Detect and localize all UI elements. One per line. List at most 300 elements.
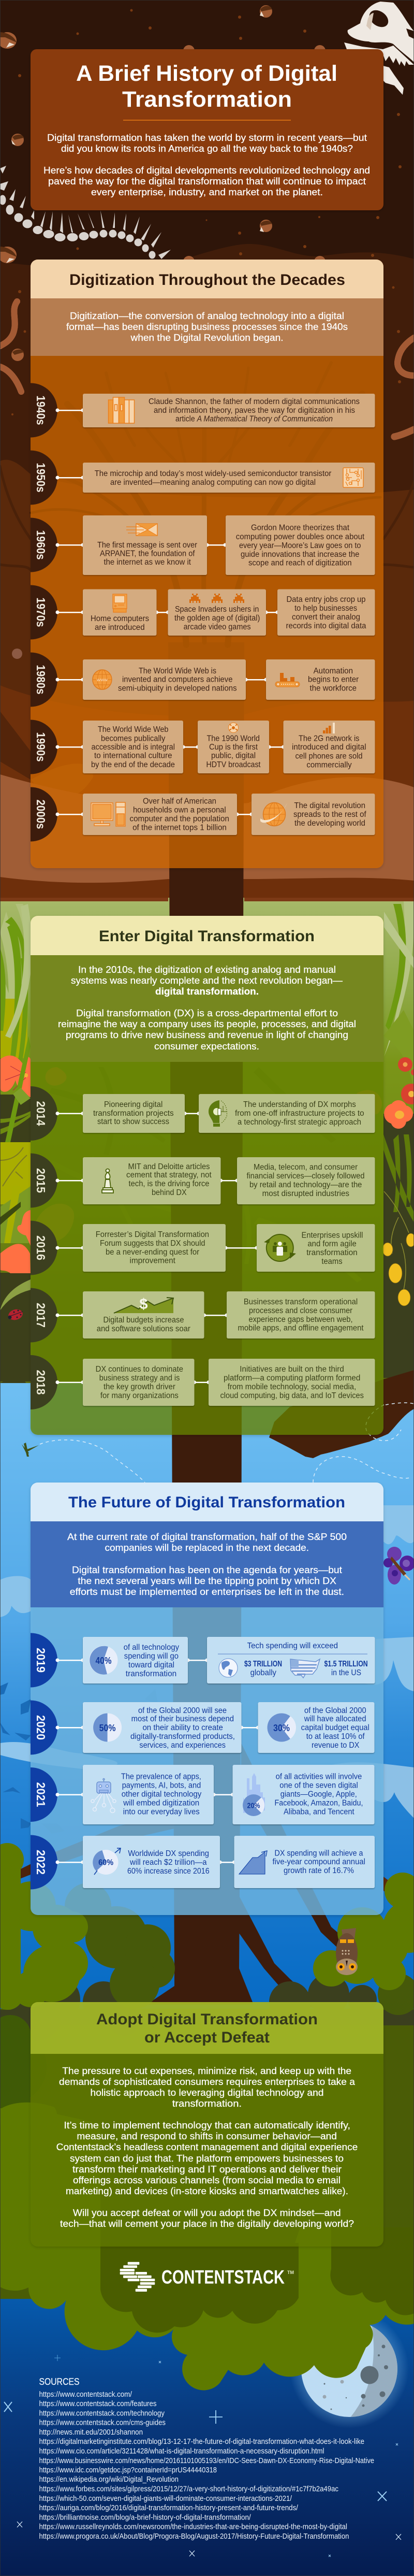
background: grass section — [0, 898, 414, 1400]
sources heading: SOURCES — [39, 2377, 80, 2387]
connector — [56, 1112, 201, 1115]
year pill — [31, 383, 57, 437]
logo wordmark: CONTENTSTACK — [161, 2266, 285, 2287]
card: $3 TRILLION — [244, 1660, 282, 1668]
card: of the internet tops 1 billion — [132, 824, 227, 832]
card — [83, 1765, 214, 1824]
section intro: Digital transformation has been on the agenda for years—but — [72, 1565, 342, 1575]
section header band — [31, 1483, 383, 1521]
icon: skyscraper pie 20%: 20% — [247, 1802, 260, 1810]
dinosaur skull fossil — [344, 2, 414, 95]
connector — [56, 812, 254, 816]
card: convert their analog — [292, 613, 360, 622]
background: soil layers — [0, 0, 414, 901]
card — [237, 1157, 375, 1204]
closing text: Will you accept defeat or will you adopt the DX mindset—and — [73, 2208, 341, 2218]
card — [257, 1224, 375, 1272]
connector — [56, 610, 279, 614]
card: the key growth driver — [103, 1383, 175, 1391]
connector — [56, 1314, 229, 1317]
year pill: 1990s — [34, 732, 48, 761]
icon: chess bishop — [102, 1169, 113, 1193]
section intro — [31, 1521, 383, 1607]
year pill: 1950s — [34, 463, 48, 492]
pie chart: 40%: 40% — [95, 1656, 112, 1666]
card: invented and computers achieve — [122, 675, 232, 684]
card: DX continues to dominate — [96, 1365, 183, 1374]
card: computing power doubles once about — [236, 533, 365, 541]
logo mark — [120, 2262, 155, 2292]
closing text: transform their marketing and IT operations and deliver their — [72, 2164, 342, 2175]
card: MIT and Deloitte articles — [128, 1162, 210, 1171]
section intro: reimagine the way a company uses its people, processes, and digital — [58, 1019, 356, 1029]
year pill: 2014 — [34, 1101, 48, 1126]
section heading: or Accept Defeat — [144, 2029, 270, 2046]
clouds — [0, 1505, 414, 1818]
section intro: In the 2010s, the digitization of existing analog and manual — [78, 965, 336, 975]
card — [83, 1291, 204, 1339]
card: transformation — [126, 1670, 176, 1678]
card: the golden age of (digital) — [174, 614, 260, 623]
card — [258, 1702, 375, 1753]
card: and form agile — [307, 1240, 357, 1248]
card: teams — [321, 1257, 343, 1266]
card — [83, 515, 207, 575]
card: will embed digitization — [123, 1799, 199, 1808]
source links: http://news.mit.edu/2001/shannon — [39, 2428, 143, 2437]
card: Media, telecom, and consumer — [254, 1163, 358, 1172]
card: will reach $2 trillion—a — [129, 1858, 207, 1867]
year pill — [31, 787, 57, 841]
card: accessible and is integral — [91, 743, 175, 752]
soil roots — [0, 363, 414, 645]
main title: A Brief History of Digital — [76, 61, 337, 86]
source links: https://www.progora.co.uk/About/Blog/Progora-Blog/August-2017/History-Future-Digital-Transformation — [39, 2532, 349, 2541]
year pill: 2018 — [34, 1370, 48, 1395]
closing text: offerings across various channels (from social media to email — [73, 2175, 341, 2185]
card — [198, 721, 269, 773]
card: of the Global 2000 — [304, 1706, 366, 1715]
panel: digitization throughout the decades — [31, 260, 383, 868]
card: every year—Moore’s Law goes on to — [239, 541, 361, 550]
lower left orange flowers — [0, 1210, 31, 1273]
timeline: 2017 — [31, 1288, 375, 1343]
card: digitally-transformed products, — [130, 1732, 235, 1741]
icon: email — [126, 524, 157, 536]
card: mobile apps, and offline engagement — [238, 1324, 364, 1333]
timeline: 2022 — [31, 1835, 375, 1890]
card: into our everyday lives — [123, 1808, 200, 1817]
card: Forrester’s Digital Transformation — [96, 1230, 209, 1239]
card: tech, is the driving force — [128, 1179, 209, 1188]
card — [83, 1224, 226, 1272]
closing text: The pressure to cut expenses, minimize risk, and keep up with the — [62, 2066, 351, 2076]
card: by retail and technology—are the — [249, 1181, 362, 1189]
card: most of their business depend — [131, 1715, 234, 1723]
card: Cup is the first — [209, 743, 258, 752]
card: most disrupted industries — [262, 1189, 349, 1198]
strawberries — [382, 1233, 414, 1306]
year pill: 2019 — [34, 1648, 48, 1673]
closing text: holistic approach to leveraging digital technology and — [90, 2088, 324, 2098]
icon: factory conveyor — [275, 673, 300, 687]
icon: growth chart with dollar — [114, 1296, 173, 1313]
source links: https://brilliantnoise.com/blog/a-brief-history-of-digital-transformation/ — [39, 2513, 252, 2522]
section header band — [31, 916, 383, 955]
intro text: paved the way for the digital transformation that will continue to impact — [48, 176, 366, 186]
card: are introduced — [95, 623, 145, 632]
year pill — [31, 1220, 57, 1275]
card: the internet as we know it — [103, 558, 191, 567]
card: Gordon Moore theorizes that — [251, 524, 350, 533]
card: behind DX — [152, 1188, 187, 1197]
dragonfly — [22, 1443, 39, 1457]
card: for many organizations — [100, 1391, 179, 1400]
timeline: 2020 — [31, 1700, 375, 1755]
closing text: measure, and respond to shifts in consumer behavior—and — [77, 2131, 337, 2141]
intro text: every enterprise, industry, and market on the planet. — [91, 187, 323, 197]
card: transformation — [306, 1248, 358, 1257]
card: The understanding of DX morphs — [243, 1100, 356, 1109]
card: Initiatives are built on the third — [240, 1365, 344, 1374]
card: transformation projects — [93, 1109, 174, 1118]
closing text: marketing) and devices (in-store kiosks and smartwatches alike). — [66, 2186, 348, 2196]
connector — [56, 543, 227, 547]
section intro: At the current rate of digital transformation, half of the S&P 500 — [67, 1532, 347, 1542]
year pill — [31, 518, 57, 572]
connector — [56, 1793, 234, 1796]
card: toward digital — [128, 1661, 174, 1670]
card: of the Global 2000 will see — [138, 1706, 227, 1715]
connector — [56, 1380, 210, 1384]
card — [234, 1836, 375, 1888]
card: public, digital — [211, 752, 256, 760]
card: ARPANET, the foundation of — [100, 550, 195, 558]
card: Over half of American — [143, 797, 216, 806]
card: HDTV broadcast — [206, 760, 261, 769]
card — [83, 463, 375, 493]
earthworms — [0, 301, 414, 437]
card: the developing world — [294, 819, 365, 828]
icon: desktop pc — [91, 802, 125, 826]
contentstack logo — [120, 2262, 294, 2292]
year pill: 2022 — [34, 1850, 48, 1875]
card: The World Wide Web — [98, 725, 168, 734]
card — [199, 1094, 375, 1133]
timeline: 2014 — [31, 1086, 375, 1141]
card: to help businesses — [294, 604, 357, 613]
timeline: 2000s — [31, 787, 375, 841]
section heading: The Future of Digital Transformation — [68, 1494, 345, 1511]
card: $1.5 TRILLION — [324, 1660, 368, 1668]
card — [284, 721, 375, 773]
card — [83, 1157, 220, 1204]
card: Businesses transform operational — [244, 1298, 358, 1306]
section intro: the next several years will be the tipping point by which DX — [78, 1576, 336, 1586]
year pill — [31, 1835, 57, 1890]
source links: https://www.contentstack.com/cms-guides — [39, 2419, 166, 2427]
card — [227, 1291, 375, 1339]
section heading: Adopt Digital Transformation — [96, 2011, 318, 2028]
card: Space Invaders ushers in — [175, 605, 259, 614]
card: of all activities will involve — [276, 1773, 362, 1781]
source links: https://www.contentstack.com/technology — [39, 2409, 165, 2417]
connector — [56, 678, 268, 682]
year pill — [31, 1633, 57, 1688]
card — [266, 659, 375, 700]
card: The microchip and today’s most widely-used semiconductor transistor — [95, 469, 331, 478]
card: Claude Shannon, the father of modern digital communications — [149, 397, 360, 406]
icon: agile team — [264, 1234, 296, 1261]
connector — [56, 408, 85, 412]
connector — [56, 1861, 236, 1864]
card: giants—Google, Apple, — [280, 1790, 357, 1799]
closing text: system can do just that. The platform empowers businesses to — [70, 2153, 344, 2164]
tree trunk — [146, 642, 254, 2005]
section intro: consumer expectations. — [154, 1041, 259, 1052]
icon: books — [109, 397, 135, 423]
section intro: systems was nearly complete and the next revolution began— — [71, 975, 343, 986]
soil pebbles and specks — [0, 5, 402, 659]
card — [252, 794, 375, 835]
card: five-year compound annual — [272, 1858, 365, 1866]
card: processes and close consumer — [249, 1306, 352, 1315]
card — [83, 1836, 220, 1888]
card: The 2G network is — [299, 735, 360, 743]
sources list — [39, 2377, 374, 2541]
card: DX spending will achieve a — [275, 1849, 363, 1858]
card: scope and reach of digitization — [248, 559, 352, 568]
icon: circuit board — [343, 468, 363, 487]
closing text: tech—that will cement your place in the digitally developing world? — [60, 2219, 354, 2229]
section heading: Enter Digital Transformation — [99, 928, 315, 945]
card: households own a personal — [133, 806, 226, 815]
connector — [56, 1659, 209, 1662]
source links: https://which-50.com/seven-digital-giants-will-dominate-consumer-interactions-2021/ — [39, 2495, 292, 2503]
card: commercially — [306, 760, 352, 770]
year pill: 2000s — [34, 800, 48, 829]
ladybug — [7, 1308, 24, 1321]
card — [168, 589, 266, 636]
night moon — [293, 2322, 406, 2426]
card: 60% increase since 2016 — [127, 1867, 210, 1876]
card — [83, 1359, 195, 1406]
icon: tech lightbulb — [209, 1100, 227, 1127]
card — [83, 794, 237, 835]
icon: signal bars — [323, 723, 335, 733]
header panel — [31, 49, 383, 210]
card: by the end of the decade — [91, 760, 175, 769]
year pill — [31, 1086, 57, 1141]
closing text: It’s time to implement technology that can automatically identify, — [64, 2120, 350, 2131]
intro text: Digital transformation has taken the world by storm in recent years—but — [47, 133, 367, 143]
source links: https://www.forbes.com/sites/gilpress/2015/12/27/a-very-short-history-of-digitization/#1c7f7b2a49ac — [39, 2485, 338, 2494]
year pill — [31, 1355, 57, 1409]
timeline: 1980s — [31, 653, 375, 707]
year pill: 1970s — [34, 598, 48, 627]
icon: www globe — [93, 670, 112, 689]
card: other digital technology — [122, 1790, 202, 1799]
card: of all technology — [124, 1643, 179, 1652]
closing text: Contentstack’s headless content management and digital experience — [56, 2142, 358, 2152]
card: spending will go — [124, 1652, 179, 1661]
year pill: 2020 — [34, 1715, 48, 1740]
card — [233, 1765, 375, 1824]
card — [226, 515, 375, 575]
intro text: Here’s how decades of digital developments revolutionized technology and — [43, 165, 370, 176]
card: from mobile technology, social media, — [228, 1383, 356, 1391]
section heading — [96, 2011, 318, 2046]
source links: https://www.russellreynolds.com/newsroom/the-industries-that-are-being-disrupted-the-most-by-digital — [39, 2523, 347, 2531]
card: will have allocated — [304, 1715, 366, 1723]
card — [83, 1702, 241, 1753]
card: The World Wide Web is — [139, 667, 216, 675]
main title line 2: Transformation — [122, 87, 292, 112]
timeline: 2015 — [31, 1153, 375, 1208]
tree root mass — [269, 1370, 414, 1458]
card: The prevalence of apps, — [121, 1773, 201, 1781]
icon: growth chart with dollar: $ — [139, 1296, 148, 1313]
timeline: 2016 — [31, 1220, 375, 1275]
year pill: 2021 — [34, 1782, 48, 1807]
card — [83, 589, 156, 636]
card: to international culture — [94, 752, 172, 760]
card: from one-off infrastructure projects to — [235, 1109, 364, 1118]
card: Alibaba, and Tencent — [284, 1808, 354, 1817]
icon: home computer — [113, 594, 127, 612]
panel: the future of digital transformation — [31, 1483, 383, 1915]
card: cloud computing, big data, and IoT devices — [220, 1391, 364, 1400]
timeline: 2021 — [31, 1765, 375, 1824]
tree foliage — [0, 1843, 414, 2390]
card: to at least 10% of — [306, 1732, 365, 1741]
icon: growth area chart — [239, 1851, 267, 1874]
year pill — [31, 1700, 57, 1755]
pie chart: 40% — [89, 1646, 118, 1675]
intro text: did you know its roots in America go all the way back to the 1940s? — [61, 143, 353, 154]
card: payments, AI, bots, and — [122, 1781, 201, 1790]
section intro — [31, 298, 383, 356]
section intro: efforts must be implemented or enterprises be left in the dust. — [70, 1587, 344, 1597]
card: start to show success — [97, 1117, 169, 1126]
closing text: demands of sophisticated consumers requires enterprises to take a — [59, 2077, 356, 2087]
panel background — [31, 49, 383, 210]
card — [83, 659, 246, 700]
section intro — [31, 955, 383, 1062]
card: on their ability to create — [142, 1723, 223, 1732]
card: and software solutions soar — [97, 1325, 190, 1333]
source links: https://digitalmarketinginstitute.com/blog/13-12-17-the-future-of-digital-transformation-what-does-it-look-like — [39, 2438, 364, 2446]
card — [83, 1094, 185, 1133]
card — [207, 1637, 375, 1683]
stars — [4, 2355, 401, 2557]
card: Digital budgets increase — [103, 1316, 184, 1325]
icon: space invaders — [189, 594, 244, 603]
card: Automation — [314, 667, 353, 675]
section intro: digital transformation. — [155, 986, 259, 997]
card: Tech spending will exceed — [247, 1642, 338, 1650]
year pill — [31, 1767, 57, 1822]
card: Enterprises upskill — [302, 1231, 363, 1240]
pie chart: 60%: 60% — [98, 1859, 113, 1867]
card: experience gaps between web, — [248, 1315, 353, 1324]
source links — [39, 2391, 374, 2541]
card — [83, 721, 183, 773]
closing text — [56, 2066, 358, 2229]
section intro: programs to drive new business and revenue in light of changing — [66, 1030, 348, 1040]
icon: globe — [219, 1659, 238, 1677]
card: Pioneering digital — [104, 1100, 162, 1109]
card: Data entry jobs crop up — [287, 595, 365, 604]
card: a technology-first strategic approach — [238, 1118, 361, 1127]
spine fossil — [0, 166, 171, 259]
card: The 1990 World — [206, 735, 260, 743]
year pill: 1980s — [34, 665, 48, 694]
year pill — [31, 1153, 57, 1208]
year pill: 2015 — [34, 1168, 48, 1193]
timeline: 2018 — [31, 1355, 375, 1409]
year pill — [31, 720, 57, 774]
connector — [56, 1726, 260, 1729]
section intro: companies will be replaced in the next decade. — [105, 1543, 309, 1553]
card: capital budget equal — [301, 1723, 369, 1732]
card: introduced and digital — [292, 743, 366, 752]
source links: https://www.cio.com/article/3211428/what-is-digital-transformation-a-necessary-disruption.html — [39, 2447, 324, 2455]
trademark: TM — [287, 2270, 294, 2276]
panel: adopt digital transformation or accept defeat — [31, 2002, 383, 2247]
card: improvement — [130, 1257, 176, 1265]
card: services, and experiences — [139, 1741, 226, 1750]
owl — [336, 1928, 358, 1975]
card: in the US — [331, 1668, 361, 1677]
background: sky — [0, 1383, 414, 2576]
card: records into digital data — [286, 622, 366, 630]
card: business strategy and is — [99, 1374, 180, 1383]
section header band — [31, 2002, 383, 2054]
year pill — [31, 653, 57, 707]
icon: globe with orbit — [260, 803, 287, 826]
card: The first message is sent over — [97, 541, 197, 550]
card: cell phones are sold — [295, 752, 362, 760]
panel: enter digital transformation — [31, 916, 383, 1435]
icon: soccer ball — [229, 723, 238, 732]
pie chart: 50% — [93, 1714, 122, 1742]
card: are invented—meaning analog computing can now go digital — [110, 478, 316, 487]
card: growth rate of 16.7% — [284, 1866, 354, 1875]
card: Home computers — [91, 614, 149, 623]
timeline: 1950s — [31, 451, 375, 505]
pie chart: 30% — [267, 1714, 296, 1742]
card: be a never-ending quest for — [106, 1248, 199, 1257]
card: article A Mathematical Theory of Communication — [175, 414, 333, 424]
timeline: 1940s — [31, 383, 375, 437]
connector — [56, 476, 85, 480]
butterfly — [383, 1547, 414, 1585]
year pill — [31, 585, 57, 639]
section heading: Digitization Throughout the Decades — [69, 271, 345, 289]
connector — [56, 1179, 239, 1182]
icon: www globe: www — [96, 678, 108, 682]
icon: robot — [91, 1779, 116, 1813]
timeline: 1990s — [31, 720, 375, 774]
flight trails — [40, 1403, 414, 1483]
right flowers — [384, 1057, 414, 1129]
year pill — [31, 1288, 57, 1343]
section intro: when the Digital Revolution began. — [130, 333, 283, 343]
pie chart: 60% — [93, 1848, 121, 1875]
card: cement that strategy, not — [126, 1171, 212, 1179]
card — [83, 394, 375, 427]
